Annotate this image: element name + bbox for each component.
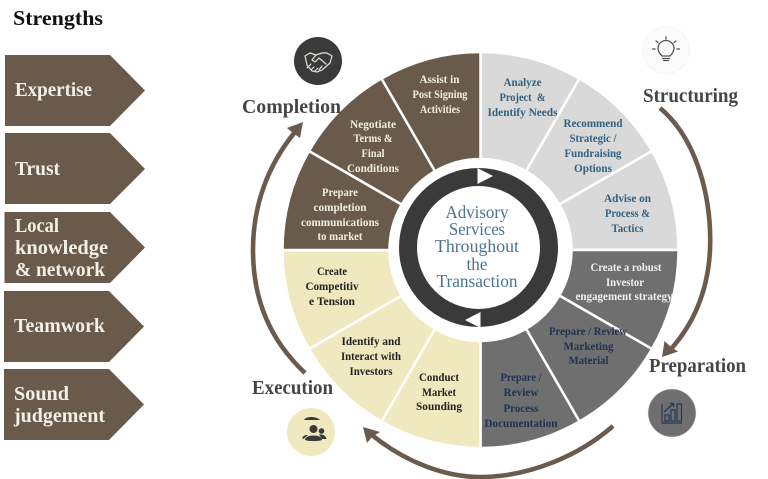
segment: Create Competitive Tension <box>282 250 402 349</box>
segment: Recommend Strategic / Fundraising Options <box>526 78 652 204</box>
segment: Prepare completion communications to market: completion <box>314 202 367 214</box>
segment: Conduct Market Sounding <box>382 329 480 448</box>
segment: Recommend Strategic / Fundraising Options: Fundraising <box>564 148 622 160</box>
strength: Teamwork <box>4 291 144 362</box>
strength: Local knowledge and network: Local <box>15 215 59 237</box>
arrow: structuring to preparation <box>660 108 710 357</box>
strength: Local knowledge and network: & network <box>15 259 106 281</box>
segment: Negotiate Terms and Final Conditions: Conditions <box>347 163 400 175</box>
arrow: preparation to execution <box>363 426 613 477</box>
strength: Sound judgement <box>4 369 144 440</box>
title: Strengths: Strengths <box>13 6 103 30</box>
segment: Negotiate Terms and Final Conditions: Terms & <box>354 133 393 145</box>
segment: Recommend Strategic / Fundraising Options: Options <box>574 163 612 175</box>
segment: Assist in Post Signing Activities: Assist in <box>420 74 460 86</box>
segment: Prepare / Review Marketing Material: Prepare / Review <box>549 326 628 338</box>
segment: Recommend Strategic / Fundraising Options: Strategic / <box>570 133 617 145</box>
segment: Identify and Interact with Investors: Interact with <box>341 351 402 363</box>
icon: light bulb <box>642 26 690 74</box>
segment: Prepare completion communications to market: communications <box>301 217 380 229</box>
centre text: Transaction <box>436 271 518 291</box>
segment: Assist in Post Signing Activities: Activities <box>420 104 460 116</box>
segment: Create Competitive Tension: e Tension <box>309 296 356 308</box>
segment: Identify and Interact with Investors: Identify and <box>342 336 401 348</box>
segment: Prepare / Review Process Documentation <box>480 329 580 448</box>
segment: Prepare / Review Process Documentation: Documentation <box>484 418 558 430</box>
segment: Analyze Project and Identify Needs: Analyze <box>504 77 542 89</box>
strength: Sound judgement: Sound <box>14 383 69 405</box>
centre text: Services <box>449 219 505 239</box>
strength: Teamwork: Teamwork <box>14 315 106 337</box>
segment: Prepare completion communications to market: Prepare <box>322 187 358 199</box>
heading: Preparation: Preparation <box>649 355 746 377</box>
strength: Expertise: Expertise <box>15 79 92 101</box>
panel: strengths list <box>4 55 145 440</box>
centre text: Throughout <box>435 236 519 256</box>
segment: Identify and Interact with Investors: Investors <box>350 366 393 378</box>
centre text <box>435 202 519 291</box>
segment: Prepare / Review Marketing Material <box>526 296 652 422</box>
segment: Negotiate Terms and Final Conditions <box>309 78 435 204</box>
segment: Create a robust Investor engagement strategy: engagement strategy <box>576 291 673 303</box>
strength: Trust <box>5 133 145 204</box>
segment: Prepare / Review Marketing Material: Marketing <box>564 341 614 353</box>
segment: Prepare / Review Process Documentation: Process <box>504 403 539 415</box>
segment: Conduct Market Sounding: Conduct <box>419 372 459 384</box>
strength: Expertise <box>5 55 145 126</box>
central ring with arrows <box>408 168 549 328</box>
icon: bar chart <box>648 389 696 437</box>
centre text: Advisory <box>446 202 508 222</box>
segment: Identify and Interact with Investors <box>309 296 435 422</box>
segment: Prepare completion communications to market <box>282 151 402 250</box>
segment: Advise on Process and Tactics <box>559 151 678 250</box>
segment: Prepare / Review Process Documentation: Review <box>504 387 539 399</box>
chart: advisory services wheel <box>282 52 678 448</box>
segment: Prepare completion communications to market: to market <box>318 231 363 243</box>
segment: Negotiate Terms and Final Conditions: Negotiate <box>350 119 396 131</box>
segment: Analyze Project and Identify Needs: Project & <box>500 92 546 104</box>
heading: Execution: Execution <box>252 377 333 399</box>
segment: Create a robust Investor engagement strategy: Create a robust <box>590 262 662 274</box>
centre text: the <box>466 254 488 274</box>
segment: Conduct Market Sounding: Market <box>422 387 456 399</box>
segment: Advise on Process and Tactics: Process & <box>605 208 650 220</box>
segment: Assist in Post Signing Activities: Post Signing <box>412 89 468 101</box>
segment: Analyze Project and Identify Needs <box>480 52 580 171</box>
icon: handshake <box>294 37 342 85</box>
segment: Prepare / Review Process Documentation: Prepare / <box>500 372 542 384</box>
segment: Negotiate Terms and Final Conditions: Final <box>362 148 384 160</box>
segment: Create Competitive Tension: Competitiv <box>306 281 359 293</box>
segment: Assist in Post Signing Activities <box>382 52 480 171</box>
strength: Sound judgement: judgement <box>13 405 105 427</box>
segment: Prepare / Review Marketing Material: Material <box>568 355 608 367</box>
heading: Completion: Completion <box>242 96 341 118</box>
segment: Recommend Strategic / Fundraising Options: Recommend <box>564 118 623 130</box>
heading: Structuring: Structuring <box>643 85 738 107</box>
icon: people under umbrella <box>287 408 335 456</box>
segment: Create Competitive Tension: Create <box>317 266 347 278</box>
strength: Local knowledge and network <box>4 212 145 283</box>
segment: Advise on Process and Tactics: Tactics <box>612 223 644 235</box>
segment: Advise on Process and Tactics: Advise on <box>604 193 652 205</box>
segment: Analyze Project and Identify Needs: Identify Needs <box>488 107 558 119</box>
strength: Trust: Trust <box>15 158 60 180</box>
arrow: execution to completion <box>253 122 305 373</box>
segment: Create a robust Investor engagement strategy: Investor <box>606 277 644 289</box>
segment: Conduct Market Sounding: Sounding <box>416 401 462 413</box>
strength: Local knowledge and network: knowledge <box>15 237 108 259</box>
segment: Create a robust Investor engagement strategy <box>559 250 678 349</box>
